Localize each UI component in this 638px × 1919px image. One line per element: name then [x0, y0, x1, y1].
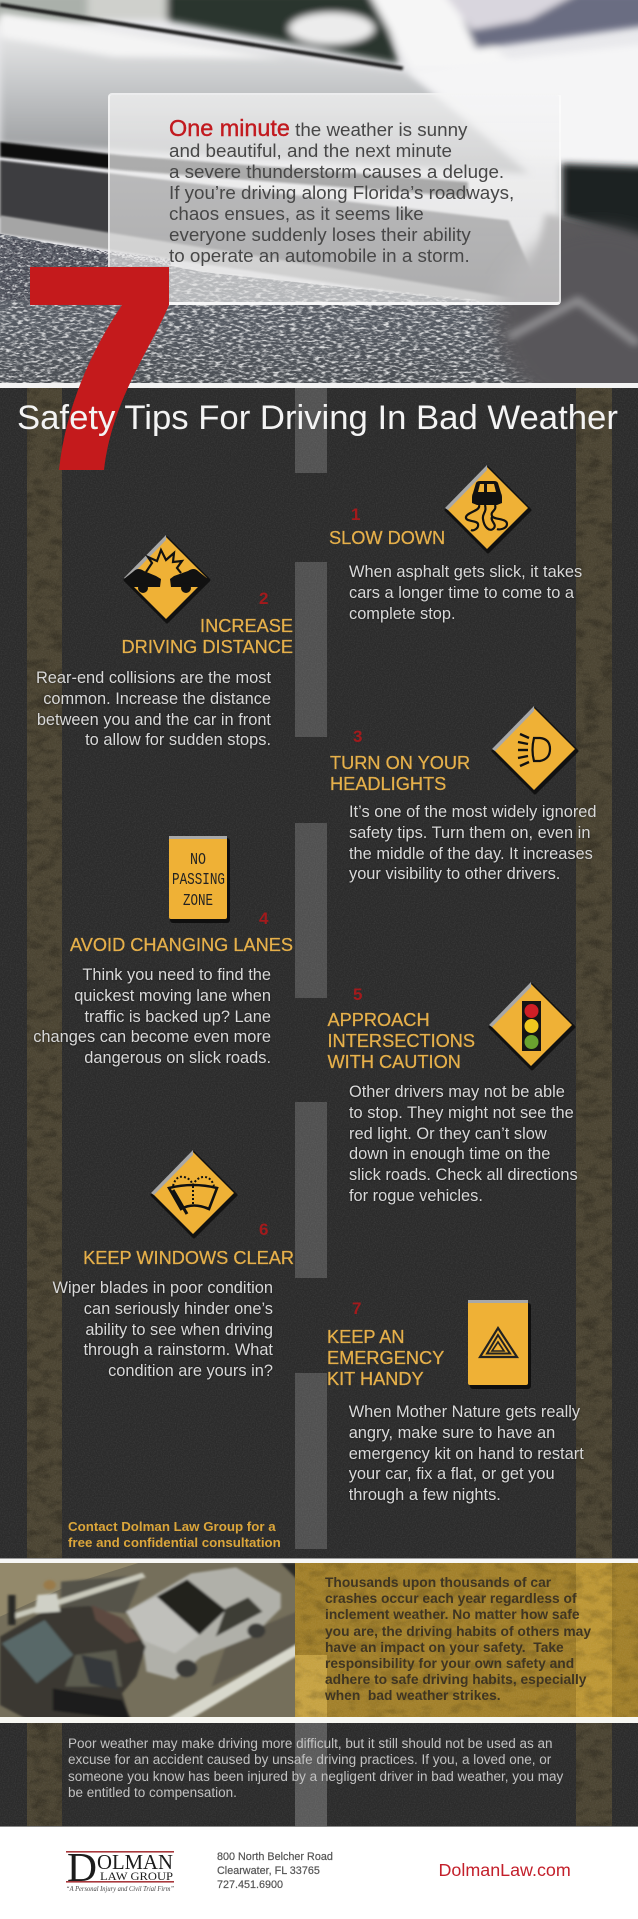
tip 5 number: 5 — [353, 985, 362, 1004]
intro text: and beautiful, and the next minute — [169, 140, 452, 161]
tip 1 heading: SLOW DOWN — [329, 528, 445, 548]
tip 6 text: ability to see when driving — [85, 1321, 273, 1339]
tip 7 heading: KIT HANDY — [327, 1369, 424, 1389]
tip 3 text: the middle of the day. It increases — [349, 845, 593, 863]
closing paragraph: someone you know has been injured by a negligent driver in bad weather, you may — [68, 1769, 563, 1784]
yellow panel text: Thousands upon thousands of car — [325, 1575, 551, 1590]
icon: slippery road sign — [444, 465, 532, 554]
icon: no passing zone sign: ZONE — [183, 891, 213, 910]
tip 2 text: common. Increase the distance — [43, 690, 271, 708]
address: 800 North Belcher Road — [217, 1851, 333, 1863]
contact line: free and confidential consultation — [68, 1535, 281, 1550]
yellow panel text: you are, the driving habits of others may — [325, 1624, 591, 1639]
tip 2 text — [36, 669, 271, 749]
tip 5 heading: INTERSECTIONS — [328, 1031, 475, 1051]
tip 2 heading — [122, 616, 293, 657]
closing paragraph: Poor weather may make driving more difficult, but it still should not be used as an — [68, 1736, 552, 1751]
tip 1 number: 1 — [351, 505, 360, 524]
tip 5 text — [349, 1083, 578, 1205]
closing paragraph: be entitled to compensation. — [68, 1785, 237, 1800]
tip 2 number: 2 — [259, 589, 268, 608]
logo: Dolman Law Group: OLMAN — [97, 1850, 173, 1874]
icon: headlight sign — [492, 706, 578, 794]
tip 6 text — [52, 1279, 273, 1380]
tip 3 text: It’s one of the most widely ignored — [349, 803, 597, 821]
tip 5 text: slick roads. Check all directions — [349, 1166, 578, 1184]
tip 4 text — [33, 966, 271, 1067]
hero photo: car driving through rain — [0, 0, 638, 383]
tip 5 text: down in enough time on the — [349, 1145, 550, 1163]
yellow panel text: when bad weather strikes. — [325, 1688, 501, 1703]
yellow panel text: crashes occur each year regardless of — [325, 1591, 577, 1606]
intro text: One minute the weather is sunny — [169, 115, 467, 141]
tip 5 heading: WITH CAUTION — [328, 1052, 461, 1072]
tip 2 text: to allow for sudden stops. — [85, 731, 271, 749]
tip 2 text: Rear-end collisions are the most — [36, 669, 271, 687]
tip 1 text — [349, 563, 582, 623]
icon: no passing zone sign — [169, 836, 230, 923]
intro text — [169, 115, 514, 266]
road background with lane stripes — [0, 383, 638, 1558]
icon: emergency triangle sign — [468, 1300, 531, 1389]
tip 6 text: through a rainstorm. What — [84, 1341, 273, 1359]
big red numeral 7 — [30, 267, 169, 470]
tip 7 heading: KEEP AN — [327, 1327, 405, 1347]
intro text: everyone suddenly loses their ability — [169, 224, 471, 245]
address: 727.451.6900 — [217, 1879, 283, 1891]
tip 4 text: Think you need to find the — [82, 966, 271, 984]
tip 6 text: condition are yours in? — [108, 1362, 273, 1380]
tip 3 heading: TURN ON YOUR — [330, 753, 470, 773]
tip 6 number: 6 — [259, 1220, 268, 1239]
tip 3 text: your visibility to other drivers. — [349, 865, 560, 883]
tip 4 text: changes can become even more — [33, 1028, 271, 1046]
website link text: DolmanLaw.com — [438, 1860, 571, 1880]
tip 7 text: emergency kit on hand to restart — [349, 1445, 584, 1463]
tip 2 heading: DRIVING DISTANCE — [122, 637, 293, 657]
person — [35, 1593, 60, 1613]
tip 3 heading — [330, 753, 470, 794]
address: Clearwater, FL 33765 — [217, 1865, 320, 1877]
closing paragraph — [68, 1736, 564, 1800]
translucent intro panel — [108, 93, 561, 305]
tip 3 text — [349, 803, 597, 883]
tip 5 text: Other drivers may not be able — [349, 1083, 565, 1101]
tip 4 heading: AVOID CHANGING LANES — [70, 935, 293, 955]
tip 1 text: complete stop. — [349, 605, 456, 623]
white band above crash panel — [0, 1558, 638, 1563]
yellow panel text — [325, 1575, 591, 1703]
tip 7 number: 7 — [352, 1299, 361, 1318]
tip 7 text: your car, fix a flat, or get you — [349, 1465, 555, 1483]
tip 7 heading — [327, 1327, 444, 1389]
tip 7 text: angry, make sure to have an — [349, 1424, 555, 1442]
crash photo — [0, 1563, 295, 1717]
icon: traffic light sign — [488, 982, 576, 1070]
tip 2 text: between you and the car in front — [37, 711, 271, 729]
yellow panel text: have an impact on your safety. Take — [325, 1640, 564, 1655]
tip 1 text: cars a longer time to come to a — [349, 584, 574, 602]
yellow text panel — [295, 1563, 638, 1717]
tip 5 text: red light. Or they can’t slow — [349, 1125, 547, 1143]
title: Safety Tips For Driving In Bad Weather — [17, 399, 618, 437]
intro text: to operate an automobile in a storm. — [169, 245, 470, 266]
yellow panel text: inclement weather. No matter how safe — [325, 1607, 580, 1622]
logo: Dolman Law Group: LAW GROUP — [100, 1869, 173, 1883]
tip 3 heading: HEADLIGHTS — [330, 774, 446, 794]
intro text: a severe thunderstorm causes a deluge. — [169, 161, 504, 182]
tip 7 text: through a few nights. — [349, 1486, 501, 1504]
tip 4 text: dangerous on slick roads. — [84, 1049, 271, 1067]
tip 4 text: traffic is backed up? Lane — [84, 1008, 271, 1026]
icon: collision sign — [124, 535, 210, 624]
lower road section — [0, 1723, 638, 1827]
tip 2 heading: INCREASE — [200, 616, 293, 636]
logo: Dolman Law Group: D — [67, 1845, 97, 1890]
tip 7 heading: EMERGENCY — [327, 1348, 444, 1368]
tip 7 text — [348, 1403, 584, 1504]
tip 6 text: can seriously hinder one’s — [84, 1300, 273, 1318]
tip 6 heading: KEEP WINDOWS CLEAR — [83, 1248, 294, 1268]
yellow panel text: responsibility for your own safety and — [325, 1656, 574, 1671]
tip 5 text: for rogue vehicles. — [349, 1187, 483, 1205]
icon: no passing zone sign: NO — [190, 850, 206, 869]
tip 1 text: When asphalt gets slick, it takes — [349, 563, 582, 581]
tip 3 number: 3 — [353, 727, 362, 746]
white band below crash panel — [0, 1717, 638, 1723]
tip 3 text: safety tips. Turn them on, even in — [349, 824, 590, 842]
tip 7 text: When Mother Nature gets really — [349, 1403, 580, 1421]
icon: windshield wiper sign — [150, 1150, 238, 1238]
closing paragraph: excuse for an accident caused by unsafe driving practices. If you, a loved one, or — [68, 1752, 551, 1767]
tip 5 text: to stop. They might not see the — [349, 1104, 574, 1122]
intro text: chaos ensues, as it seems like — [169, 203, 424, 224]
intro text: If you’re driving along Florida’s roadways, — [169, 182, 514, 203]
tip 5 heading: APPROACH — [328, 1010, 430, 1030]
address — [217, 1851, 333, 1891]
contact line: Contact Dolman Law Group for a — [68, 1519, 276, 1534]
contact line — [68, 1519, 281, 1550]
dark car — [0, 1606, 146, 1720]
tip 5 heading — [327, 1010, 475, 1072]
logo: Dolman Law Group — [66, 1845, 174, 1893]
silver car — [126, 1567, 281, 1679]
tip 4 text: quickest moving lane when — [74, 987, 271, 1005]
yellow panel text: adhere to safe driving habits, especially — [325, 1672, 586, 1687]
tip 6 text: Wiper blades in poor condition — [52, 1279, 273, 1297]
tip 4 number: 4 — [259, 909, 268, 928]
